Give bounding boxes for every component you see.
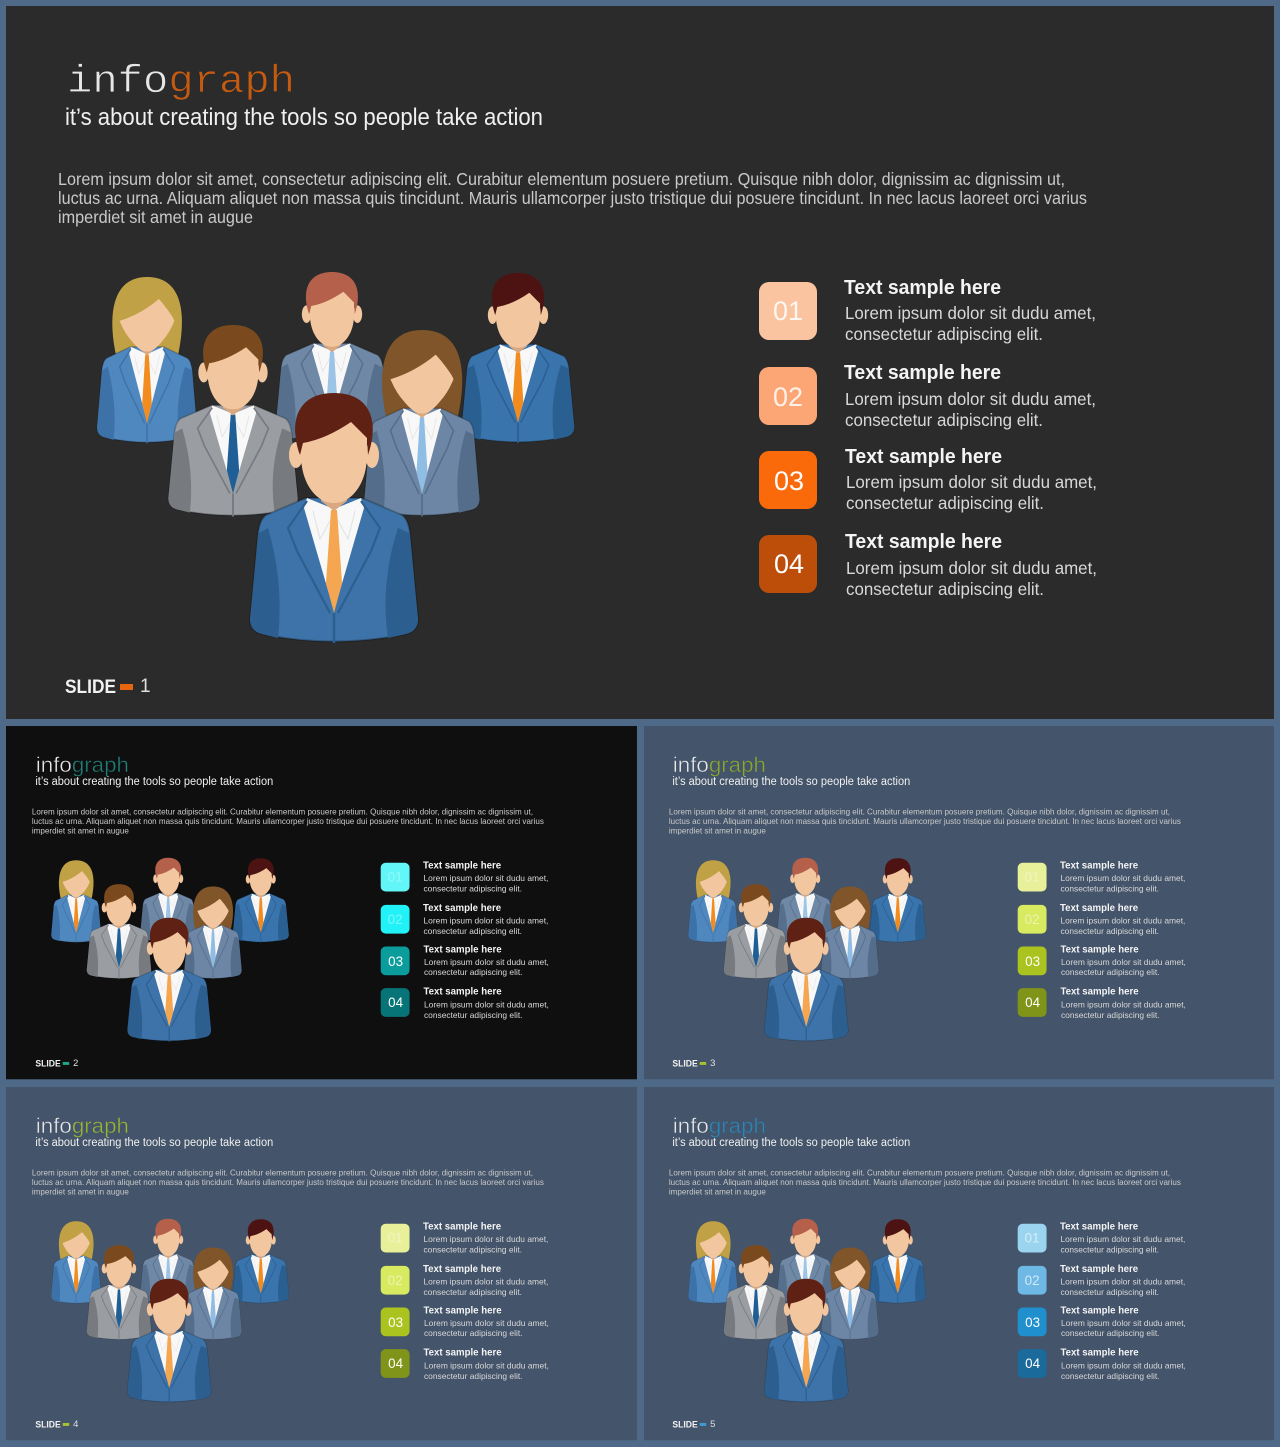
list item 04: Lorem ipsum dolor sit dudu amet, [424,999,549,1009]
list item 01: 01 [773,296,803,326]
intro text: luctus ac urna. Aliquam aliquet non massa quis tincidunt. Mauris ullamcorper justo tristique dui posuere tincidunt. In nec lacus laoreet orci varius [669,816,1182,826]
list item 02: Text sample here [1060,1264,1138,1275]
title: infograph [36,754,129,777]
list item 03: Text sample here [1060,1305,1139,1316]
list item 01: Text sample here [423,861,501,872]
list item 03 [759,445,1097,513]
illustration: business team [51,1219,289,1403]
list item 02: Lorem ipsum dolor sit dudu amet, [1060,1277,1185,1287]
slide number: 3 [710,1057,715,1068]
subtitle: it’s about creating the tools so people take action [672,774,910,788]
intro text: Lorem ipsum dolor sit amet, consectetur adipiscing elit. Curabitur elementum posuere pretium. Quisque nibh dolor, dignissim ac dignissim ut, [32,1168,533,1178]
list item 02: Text sample here [423,1264,501,1275]
list item 01: Text sample here [1060,861,1138,872]
list item 01 [1018,861,1185,893]
list item 03: 03 [774,466,804,496]
slide number: SLIDE [672,1057,698,1068]
illustration: business team [688,1219,926,1403]
list item 03: Lorem ipsum dolor sit dudu amet, [424,957,549,967]
list item 02 [381,903,548,936]
list item 03: 03 [1025,954,1040,969]
list item 02: consectetur adipiscing elit. [423,1287,522,1297]
slide number [35,1418,78,1429]
list item 01: consectetur adipiscing elit. [423,1245,522,1254]
intro text: Lorem ipsum dolor sit amet, consectetur adipiscing elit. Curabitur elementum posuere pretium. Quisque nibh dolor, dignissim ac dignissim ut, [58,169,1065,189]
list item 01 [759,276,1096,344]
subtitle: it’s about creating the tools so people take action [35,774,273,788]
list item 01: Text sample here [1060,1222,1138,1233]
intro text: imperdiet sit amet in augue [669,1187,766,1197]
illustration: business team [688,858,926,1042]
list item 03: consectetur adipiscing elit. [846,493,1044,513]
panel: slide 5 [644,1087,1274,1440]
list item 01: consectetur adipiscing elit. [423,884,522,893]
list item 01: 01 [388,870,403,885]
slide number: 1 [140,676,151,697]
list item 03: Lorem ipsum dolor sit dudu amet, [846,472,1097,492]
intro text: Lorem ipsum dolor sit amet, consectetur adipiscing elit. Curabitur elementum posuere pretium. Quisque nibh dolor, dignissim ac dignissim ut, [669,807,1170,817]
intro text: luctus ac urna. Aliquam aliquet non massa quis tincidunt. Mauris ullamcorper justo tristique dui posuere tincidunt. In nec lacus laoreet orci varius [58,188,1087,208]
list item 02: consectetur adipiscing elit. [423,926,522,936]
list item 02 [759,361,1096,430]
slide number: 5 [710,1418,715,1429]
list item 02: 02 [1025,912,1040,927]
list item 04: Lorem ipsum dolor sit dudu amet, [1061,999,1186,1009]
intro text: imperdiet sit amet in augue [32,826,129,836]
intro text: Lorem ipsum dolor sit amet, consectetur adipiscing elit. Curabitur elementum posuere pretium. Quisque nibh dolor, dignissim ac dignissim ut, [32,807,533,817]
panel: slide 4 [6,1087,637,1440]
intro text: luctus ac urna. Aliquam aliquet non massa quis tincidunt. Mauris ullamcorper justo tristique dui posuere tincidunt. In nec lacus laoreet orci varius [669,1177,1182,1187]
list item 03: consectetur adipiscing elit. [1061,967,1160,977]
list item 02: Text sample here [423,903,501,914]
list item 04: Text sample here [1060,987,1139,998]
panel: slide 3 [644,726,1274,1079]
list item 04: 04 [388,1356,404,1371]
subtitle: it’s about creating the tools so people take action [65,104,543,131]
list item 04: 04 [774,549,804,579]
intro text [669,807,1182,836]
list item 04 [1018,987,1186,1020]
list item 02: 02 [388,912,403,927]
list item 01: consectetur adipiscing elit. [1060,1245,1159,1254]
list item 02: 02 [1025,1273,1040,1288]
list item 03 [1018,944,1186,977]
slide number: 2 [73,1057,78,1068]
list item 02: Text sample here [1060,903,1138,914]
title: infograph [673,754,766,777]
slide number: SLIDE [672,1418,698,1429]
slide number [672,1418,715,1429]
intro text [32,1168,545,1197]
list item 02: Text sample here [844,361,1001,384]
list item 02 [1018,1264,1185,1297]
slide number: SLIDE [35,1418,61,1429]
list item 04: Text sample here [423,987,502,998]
list item 03: Lorem ipsum dolor sit dudu amet, [424,1318,549,1328]
list item 04: Text sample here [1060,1348,1139,1359]
list item 04: Text sample here [845,530,1002,553]
list item 02: consectetur adipiscing elit. [845,410,1043,430]
list item 03: Lorem ipsum dolor sit dudu amet, [1061,957,1186,967]
list item 02: consectetur adipiscing elit. [1060,926,1159,936]
list item 04: Lorem ipsum dolor sit dudu amet, [846,558,1097,578]
list item 02: 02 [388,1273,403,1288]
list item 03: 03 [388,954,403,969]
list item 03: 03 [388,1315,403,1330]
list item 04: 04 [1025,995,1041,1010]
intro text: Lorem ipsum dolor sit amet, consectetur adipiscing elit. Curabitur elementum posuere pretium. Quisque nibh dolor, dignissim ac dignissim ut, [669,1168,1170,1178]
list item 01: 01 [388,1231,403,1246]
list item 01: Lorem ipsum dolor sit dudu amet, [1060,1234,1185,1244]
intro text [58,169,1087,227]
list item 03: 03 [1025,1315,1040,1330]
slide number: SLIDE [35,1057,61,1068]
panel: slide 2 [6,726,637,1079]
intro text: imperdiet sit amet in augue [58,207,253,227]
intro text: luctus ac urna. Aliquam aliquet non massa quis tincidunt. Mauris ullamcorper justo tristique dui posuere tincidunt. In nec lacus laoreet orci varius [32,1177,545,1187]
list item 03: Text sample here [423,944,502,955]
title: infograph [36,1115,129,1138]
title: infograph [673,1115,766,1138]
illustration: business team [51,858,289,1042]
illustration: business team [97,272,574,643]
list item 02: Lorem ipsum dolor sit dudu amet, [423,1277,548,1287]
slide number: 4 [73,1418,78,1429]
list item 03: consectetur adipiscing elit. [424,1328,523,1338]
list item 01: Lorem ipsum dolor sit dudu amet, [1060,873,1185,883]
list item 03: Text sample here [845,445,1002,468]
list item 04: 04 [1025,1356,1041,1371]
title: infograph [67,60,295,104]
list item 01: Text sample here [844,276,1001,299]
list item 04: consectetur adipiscing elit. [1061,1371,1160,1381]
list item 03: consectetur adipiscing elit. [424,967,523,977]
list item 01 [381,861,548,893]
list item 02: Lorem ipsum dolor sit dudu amet, [1060,916,1185,926]
slide number [672,1057,715,1068]
list item 04: consectetur adipiscing elit. [846,579,1044,599]
list item 01: consectetur adipiscing elit. [845,324,1043,344]
list item 01 [381,1222,548,1254]
list item 02: Lorem ipsum dolor sit dudu amet, [423,916,548,926]
list item 03 [381,944,549,977]
list item 03 [1018,1305,1186,1338]
list item 04: Lorem ipsum dolor sit dudu amet, [1061,1360,1186,1370]
list item 02 [1018,903,1185,936]
list item 04: consectetur adipiscing elit. [424,1371,523,1381]
list item 03: Text sample here [423,1305,502,1316]
list item 01: Text sample here [423,1222,501,1233]
subtitle: it’s about creating the tools so people take action [35,1135,273,1149]
list item 03: consectetur adipiscing elit. [1061,1328,1160,1338]
intro text [669,1168,1182,1197]
list item 02: consectetur adipiscing elit. [1060,1287,1159,1297]
list item 01: 01 [1025,870,1040,885]
list item 04: consectetur adipiscing elit. [424,1010,523,1020]
list item 01: Lorem ipsum dolor sit dudu amet, [423,873,548,883]
list item 04: Text sample here [423,1348,502,1359]
intro text: luctus ac urna. Aliquam aliquet non massa quis tincidunt. Mauris ullamcorper justo tristique dui posuere tincidunt. In nec lacus laoreet orci varius [32,816,545,826]
intro text [32,807,545,836]
list item 01: consectetur adipiscing elit. [1060,884,1159,893]
list item 01: 01 [1025,1231,1040,1246]
list item 04: Lorem ipsum dolor sit dudu amet, [424,1360,549,1370]
intro text: imperdiet sit amet in augue [669,826,766,836]
list item 04: consectetur adipiscing elit. [1061,1010,1160,1020]
list item 01 [1018,1222,1185,1254]
list item 02: 02 [773,382,803,412]
panel: slide 1 [6,6,1274,719]
list item 01: Lorem ipsum dolor sit dudu amet, [845,303,1096,323]
list item 04 [381,987,549,1020]
slide number [65,676,151,698]
slide number [35,1057,78,1068]
list item 03: Text sample here [1060,944,1139,955]
list item 01: Lorem ipsum dolor sit dudu amet, [423,1234,548,1244]
list item 04: 04 [388,995,404,1010]
list item 04 [381,1348,549,1381]
slide number: SLIDE [65,677,116,698]
list item 04 [759,530,1097,599]
list item 02: Lorem ipsum dolor sit dudu amet, [845,389,1096,409]
list item 03: Lorem ipsum dolor sit dudu amet, [1061,1318,1186,1328]
subtitle: it’s about creating the tools so people take action [672,1135,910,1149]
list item 03 [381,1305,549,1338]
intro text: imperdiet sit amet in augue [32,1187,129,1197]
list item 04 [1018,1348,1186,1381]
list item 02 [381,1264,548,1297]
